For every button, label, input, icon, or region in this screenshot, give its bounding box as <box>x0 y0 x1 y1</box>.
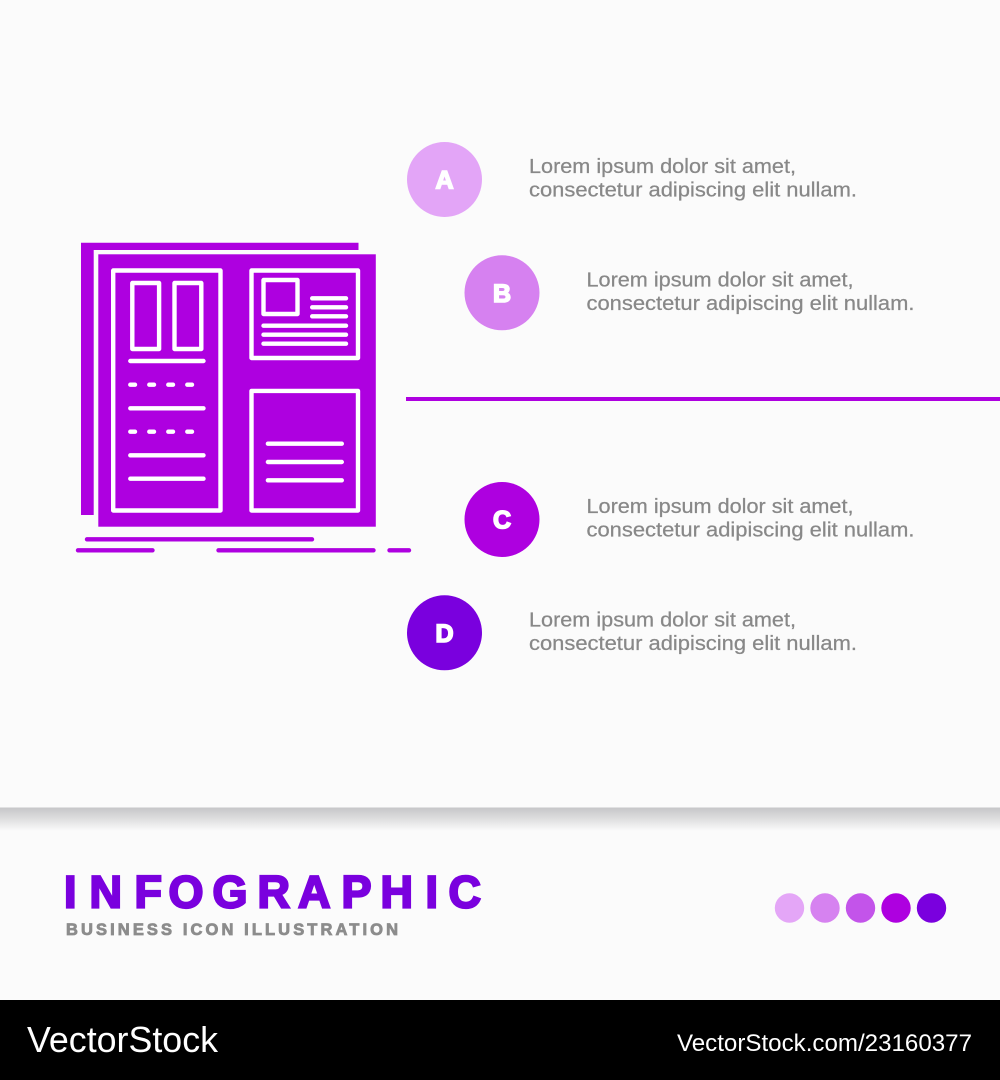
badge D <box>407 595 482 670</box>
badge C: C <box>493 506 511 534</box>
title: INFOGRAPHIC <box>64 866 481 918</box>
top right card wireframe <box>252 270 358 358</box>
divider line <box>406 397 1000 401</box>
text D <box>529 610 857 655</box>
text A: consectetur adipiscing elit nullam. <box>529 180 857 202</box>
badge C <box>464 482 540 557</box>
bottom right card wireframe <box>252 391 358 510</box>
badge B <box>464 255 540 330</box>
badge D: D <box>435 620 454 648</box>
item D <box>407 595 857 670</box>
text B: consectetur adipiscing elit nullam. <box>586 293 914 315</box>
text C: consectetur adipiscing elit nullam. <box>586 520 914 542</box>
watermark url: VectorStock.com/23160377 <box>677 1030 972 1057</box>
icon: layout wireframe document <box>78 243 409 550</box>
badge A: A <box>435 166 454 194</box>
text B <box>586 270 914 315</box>
badge A <box>407 142 482 217</box>
palette dots <box>775 893 946 923</box>
back sheet <box>81 243 358 515</box>
ground lines <box>78 539 409 550</box>
item A <box>407 142 857 217</box>
text A <box>529 156 857 202</box>
text C: Lorem ipsum dolor sit amet, <box>586 496 854 518</box>
item C <box>464 482 914 557</box>
watermark logo: VectorStock <box>27 1019 219 1060</box>
text C <box>586 496 914 542</box>
watermark bar <box>0 1000 1000 1080</box>
text D: consectetur adipiscing elit nullam. <box>529 633 857 655</box>
text A: Lorem ipsum dolor sit amet, <box>529 156 796 178</box>
item B <box>464 255 914 330</box>
front sheet <box>98 254 376 527</box>
text B: Lorem ipsum dolor sit amet, <box>586 270 854 292</box>
footer shadow band <box>0 808 1000 831</box>
text D: Lorem ipsum dolor sit amet, <box>529 610 796 632</box>
subtitle: BUSINESS ICON ILLUSTRATION <box>66 921 398 939</box>
badge B: B <box>493 280 511 308</box>
left column wireframe <box>113 270 220 510</box>
